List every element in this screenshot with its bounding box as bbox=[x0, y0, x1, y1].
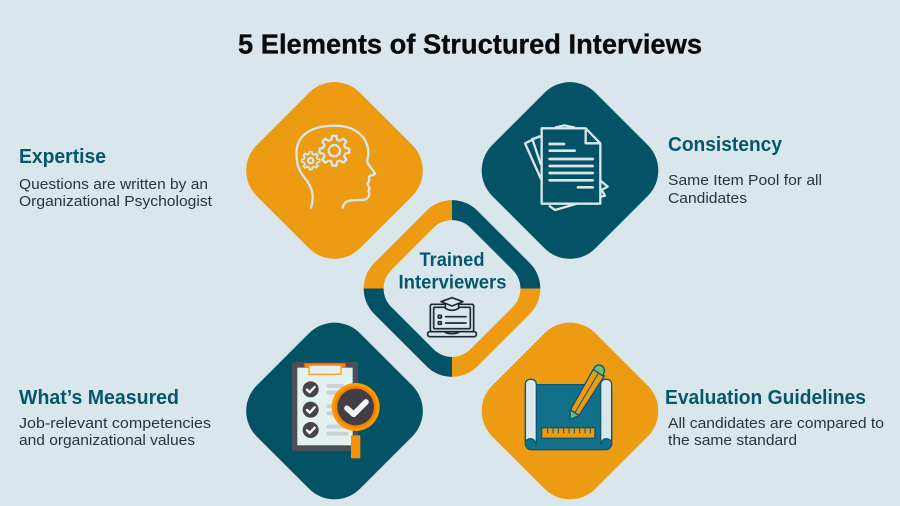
icon: stacked documents bbox=[525, 125, 608, 210]
icon: clipboard with magnifier bbox=[292, 362, 380, 458]
panel: trained interviewers ring bbox=[364, 200, 540, 377]
panel: what's measured diamond bbox=[231, 308, 438, 506]
icon: blueprint with pencil and ruler bbox=[525, 365, 612, 450]
text block: evaluation guidelines: the same standard bbox=[668, 432, 797, 449]
panel: consistency diamond bbox=[467, 67, 673, 274]
text block: expertise: Questions are written by an bbox=[19, 176, 208, 193]
heading: trained interviewers: Trained bbox=[420, 250, 484, 271]
text block: what's measured: What’s Measured bbox=[19, 387, 179, 409]
text block: what's measured: and organizational values bbox=[19, 432, 195, 449]
text block: expertise: Organizational Psychologist bbox=[19, 193, 213, 210]
text block: evaluation guidelines: Evaluation Guidelines bbox=[665, 387, 866, 409]
text block: consistency: Consistency bbox=[668, 134, 783, 156]
text block: what's measured: Job-relevant competencies bbox=[19, 415, 211, 432]
panel: evaluation guidelines diamond bbox=[467, 308, 673, 506]
text block: evaluation guidelines: All candidates are compared to bbox=[668, 415, 884, 432]
icon: head with gears bbox=[297, 126, 375, 208]
panel: expertise diamond bbox=[231, 67, 438, 274]
text block: consistency: Same Item Pool for all bbox=[668, 172, 822, 189]
icon: laptop with graduation cap bbox=[428, 298, 476, 337]
text block: expertise bbox=[19, 146, 213, 210]
title: 5 Elements of Structured Interviews bbox=[238, 28, 702, 60]
heading: trained interviewers: Interviewers bbox=[398, 272, 506, 294]
text block: expertise: Expertise bbox=[19, 146, 106, 168]
text block: evaluation guidelines bbox=[665, 387, 884, 449]
text block: consistency bbox=[668, 134, 822, 207]
text block: what's measured bbox=[19, 387, 211, 449]
heading: trained interviewers bbox=[398, 250, 506, 294]
text block: consistency: Candidates bbox=[668, 190, 747, 207]
